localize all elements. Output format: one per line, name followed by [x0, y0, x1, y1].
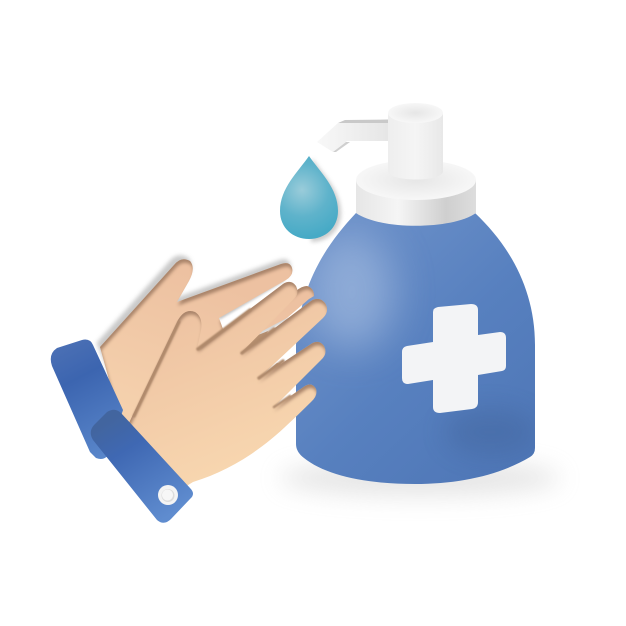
bottle body	[290, 205, 540, 490]
front cuff	[91, 410, 193, 523]
back hand	[100, 259, 314, 430]
pump collar	[356, 160, 476, 226]
back cuff	[51, 340, 123, 459]
pump nozzle	[317, 120, 388, 152]
soap drop	[280, 156, 341, 242]
back hand shadow	[96, 255, 291, 418]
cuff button	[158, 485, 178, 505]
finger creases	[134, 310, 290, 416]
crease fills	[236, 331, 268, 356]
hands	[51, 255, 327, 523]
gap shadow lines	[219, 279, 283, 317]
cross symbol	[402, 304, 506, 413]
illustration: hands and sanitizer bottle	[50, 103, 552, 523]
front hand	[128, 282, 327, 490]
bottle ground shadow	[280, 460, 560, 496]
pump stem	[388, 103, 443, 180]
soap bottle	[290, 103, 540, 490]
